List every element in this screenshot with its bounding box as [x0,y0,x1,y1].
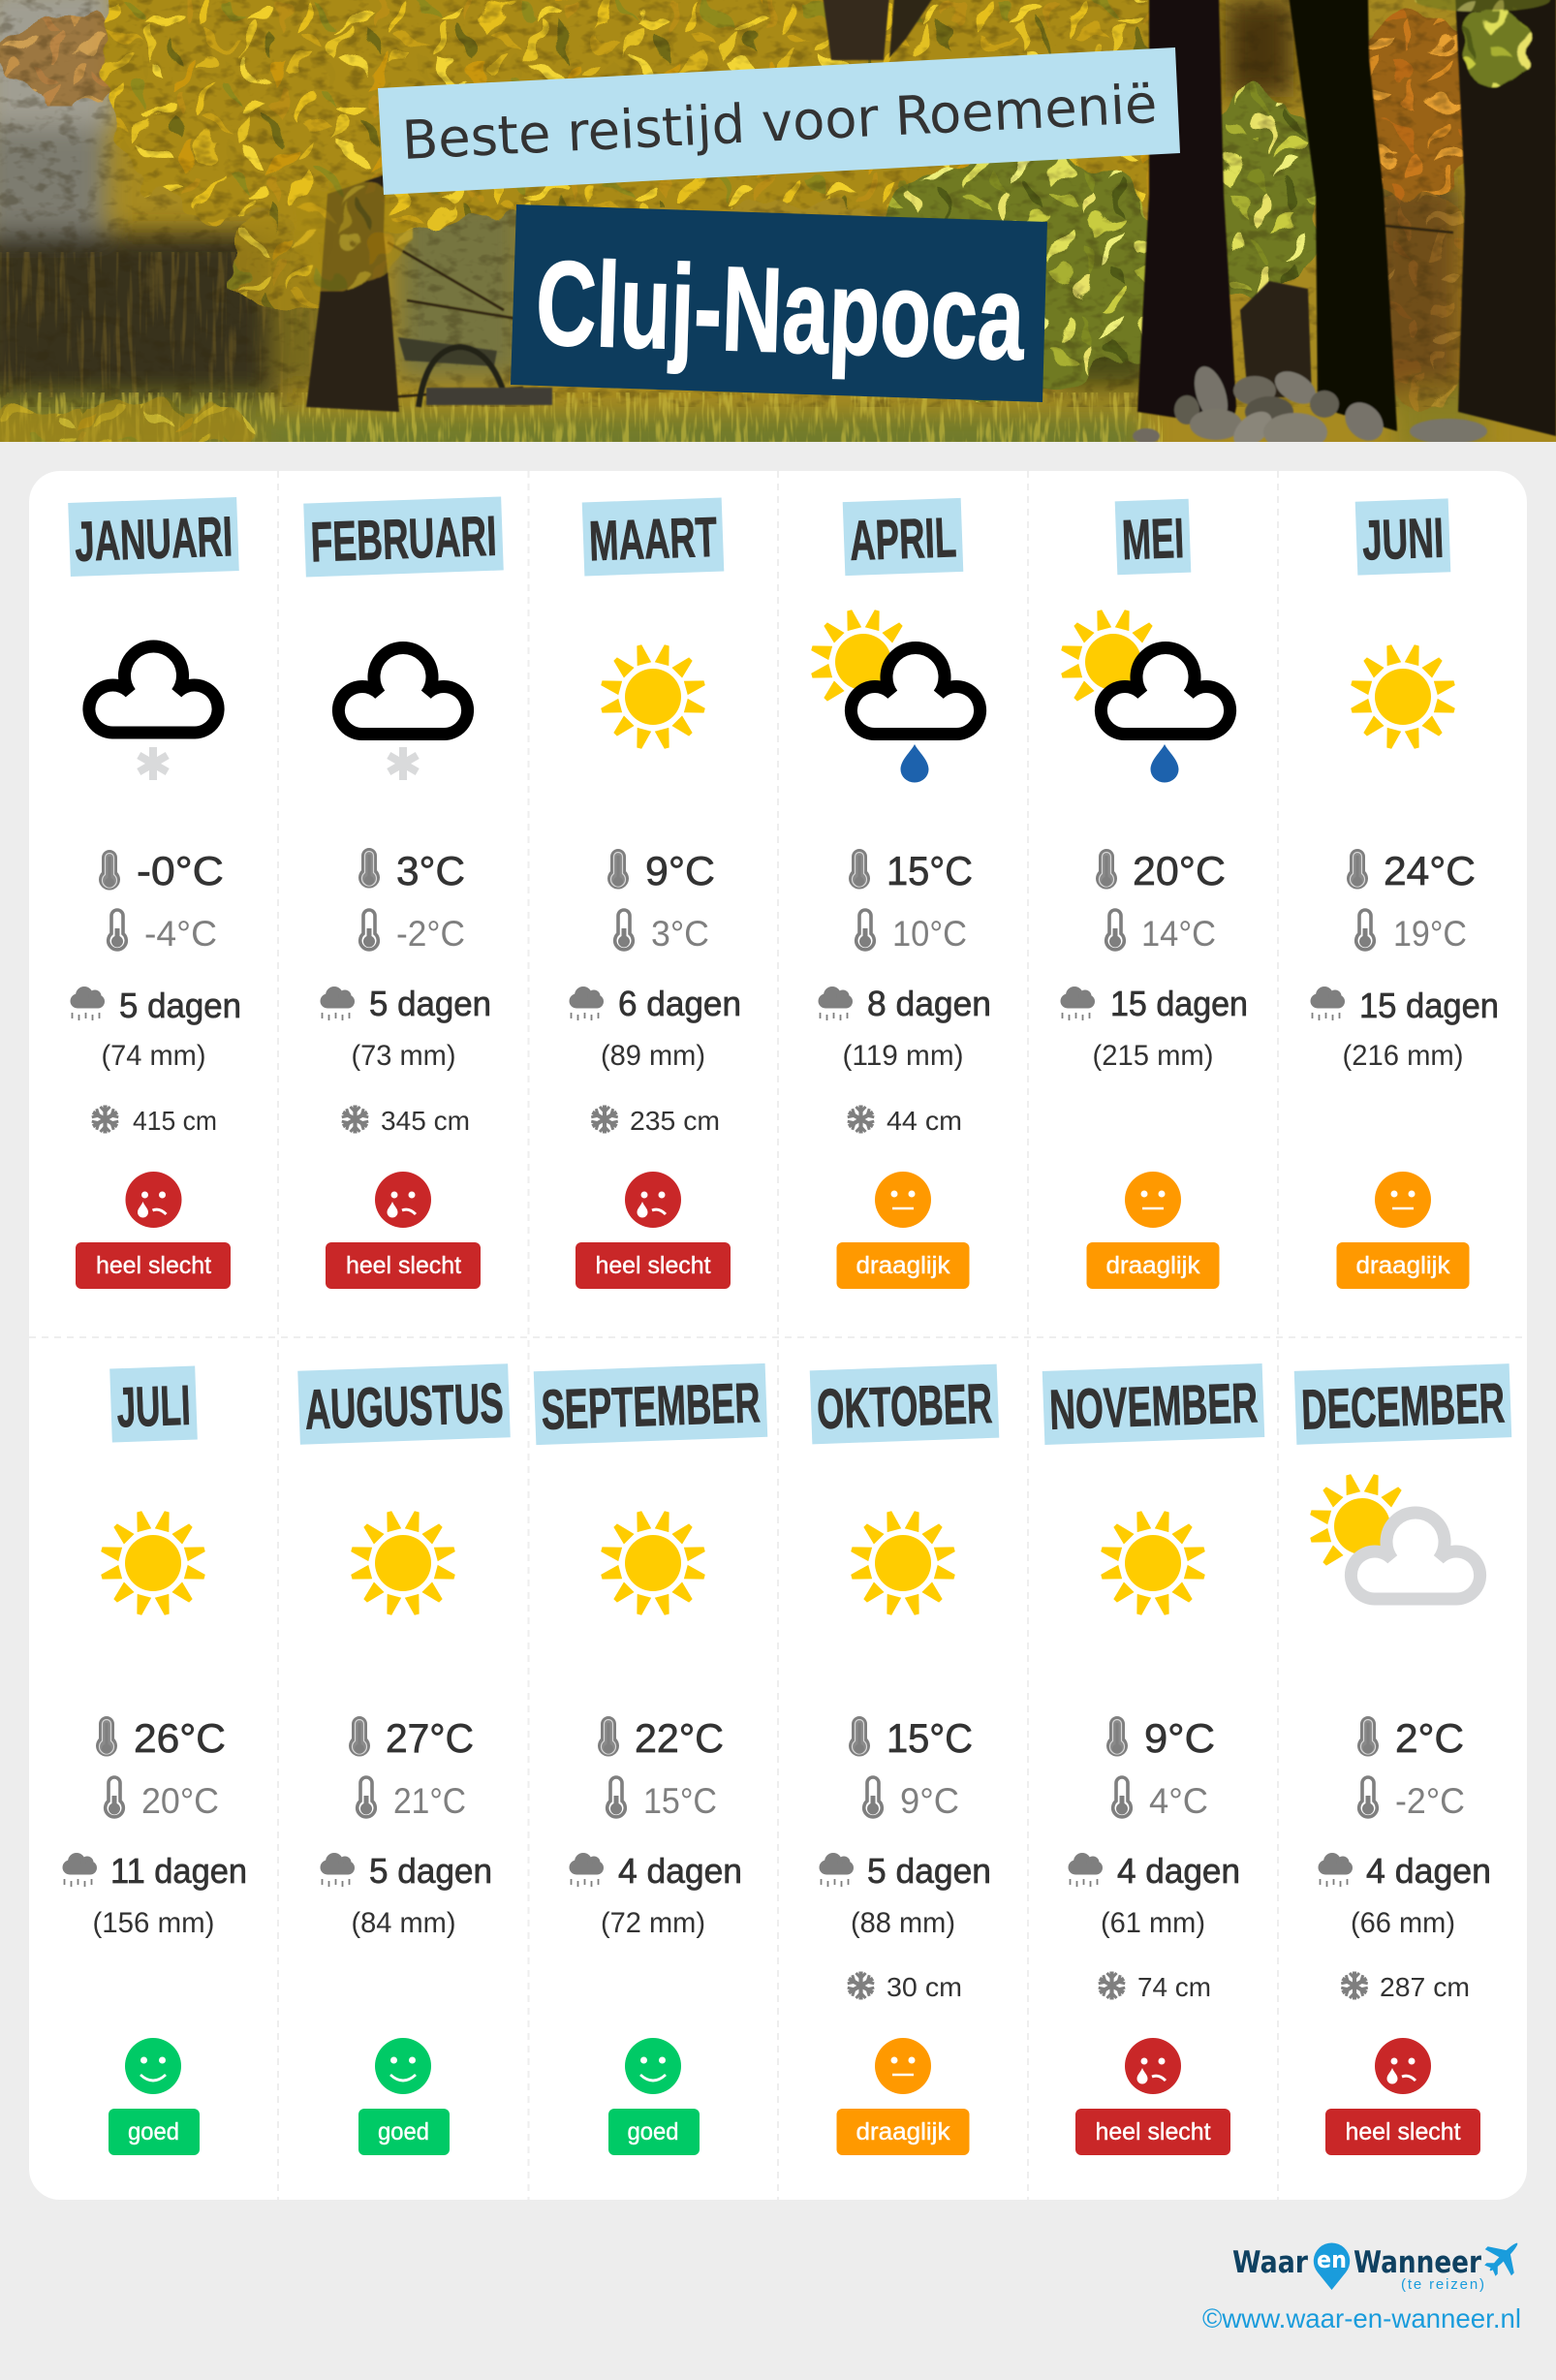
min temperature: 21°C [393,1781,466,1821]
max temperature [849,848,973,893]
rainfall: (61 mm) [1101,1907,1205,1939]
month heading [1043,1363,1264,1445]
snow [846,1105,962,1136]
icon: sun, cloud and rain drop [1060,609,1230,783]
month heading [297,1363,511,1445]
rain days: 4 dagen [618,1851,742,1891]
max temperature [349,1715,474,1761]
panel: oktober [810,1364,999,2155]
month heading: SEPTEMBER [541,1371,762,1442]
rainfall: (73 mm) [351,1040,455,1072]
max temperature: 20°C [1133,848,1226,893]
panel: februari [303,496,504,1289]
min temperature: 10°C [892,914,967,954]
rating face [625,1172,681,1228]
month heading: APRIL [849,506,957,573]
max temperature [1106,1715,1215,1761]
month heading [1355,498,1450,576]
min temperature: 15°C [643,1781,717,1821]
max temperature: -0°C [137,848,224,893]
rating face [1125,1172,1181,1228]
month heading [109,1365,198,1443]
rating badge [837,2109,969,2155]
snow: 74 cm [1137,1972,1211,2002]
min temperature [856,910,967,954]
min temperature: -2°C [396,914,465,954]
rating face [125,2038,181,2094]
snow [1097,1971,1211,2002]
rating badge [1075,2109,1230,2155]
rainfall: (66 mm) [1351,1907,1455,1939]
month heading: JULI [115,1374,192,1439]
rating badge: draaglijk [1106,1252,1200,1279]
snow: 415 cm [133,1106,217,1136]
rating face [375,2038,431,2094]
rating badge: heel slecht [1345,2118,1461,2145]
panel: november [1043,1363,1264,2155]
icon: sun and grey cloud [1309,1473,1480,1599]
rating badge [76,1242,231,1289]
logo: Waar en Wanneer: (te reizen) [1401,2276,1484,2293]
icon: sun [1350,643,1456,750]
month heading: JANUARI [74,505,233,574]
max temperature: 15°C [887,1715,973,1761]
min temperature [1106,910,1216,954]
rating badge [837,1242,969,1289]
rating badge: draaglijk [856,1252,950,1279]
icon: sun [100,1510,206,1616]
icon: airplane [1477,2230,1531,2284]
website url: ©www.waar-en-wanneer.nl [1202,2303,1521,2333]
rainfall: (88 mm) [851,1907,955,1939]
rain days: 6 dagen [618,984,741,1023]
min temperature: 20°C [141,1781,219,1821]
month heading [68,497,239,577]
rain days [320,984,491,1023]
logo: Waar en Wanneer: Wanneer [1354,2245,1482,2280]
panel: december [1294,1363,1511,2155]
rating badge: draaglijk [856,2118,950,2145]
icon: map pin: en [1317,2246,1347,2273]
min temperature: 3°C [651,914,709,954]
max temperature: 3°C [396,848,465,893]
rating badge: goed [128,2118,179,2145]
rating badge: heel slecht [96,1252,211,1279]
rating badge [109,2109,200,2155]
snow [846,1971,962,2002]
rainfall: (74 mm) [101,1040,205,1072]
snow: 235 cm [630,1106,720,1136]
month heading: OKTOBER [816,1372,993,1441]
rating badge: draaglijk [1356,1252,1450,1279]
max temperature: 2°C [1395,1715,1464,1761]
rainfall: (89 mm) [601,1040,705,1072]
min temperature [1359,1777,1465,1821]
rainfall: (216 mm) [1343,1040,1463,1072]
title banner: Beste reistijd voor Roemenië: Beste reistijd voor Roemenië [401,73,1159,172]
min temperature: -4°C [144,914,217,954]
icon: cloud with snow [338,647,468,780]
max temperature [99,848,224,893]
max temperature [607,848,715,893]
rainfall: (84 mm) [351,1907,455,1939]
rainfall: (215 mm) [1093,1040,1213,1072]
max temperature: 9°C [645,848,715,893]
logo: Waar en Wanneer: Waar [1232,2245,1309,2280]
snow: 345 cm [381,1106,470,1136]
month heading: MAART [588,506,718,573]
rating badge [358,2109,450,2155]
rain days: 5 dagen [369,1851,492,1891]
rain days: 4 dagen [1117,1851,1240,1891]
rating face [875,1172,931,1228]
rainfall: (119 mm) [843,1040,963,1072]
rain days: 5 dagen [119,986,241,1025]
rating badge [1337,1242,1469,1289]
month heading [843,498,963,576]
month heading: JUNI [1361,507,1445,572]
rain days: 5 dagen [369,984,491,1023]
min temperature [615,910,709,954]
rating badge: heel slecht [346,1252,461,1279]
max temperature [598,1715,724,1761]
max temperature [358,848,465,893]
rating face [1125,2038,1181,2094]
snow: 30 cm [887,1972,962,2002]
rating badge: heel slecht [595,1252,711,1279]
panel: augustus [297,1363,511,2155]
max temperature: 9°C [1144,1715,1215,1761]
rating face [1375,1172,1431,1228]
icon: sun, cloud and rain drop [810,609,980,783]
logo: Waar en Wanneer [1232,2230,1531,2293]
snow: 44 cm [887,1106,962,1136]
rating badge [1087,1242,1219,1289]
min temperature [360,910,465,954]
panel: april [810,498,991,1289]
rating badge: heel slecht [1095,2118,1211,2145]
rating face [625,2038,681,2094]
max temperature: 22°C [635,1715,724,1761]
min temperature: 19°C [1393,914,1467,954]
min temperature [358,1777,466,1821]
max temperature: 24°C [1384,848,1476,893]
rain days: 4 dagen [1366,1851,1491,1891]
panel: juli [62,1365,247,2155]
month heading [582,498,724,576]
snow [590,1105,720,1136]
min temperature [607,1777,717,1821]
rain days: 8 dagen [867,984,991,1023]
min temperature: 4°C [1149,1781,1208,1821]
snow [340,1105,470,1136]
max temperature [849,1715,973,1761]
panel: september [534,1363,767,2155]
month heading: AUGUSTUS [304,1371,505,1442]
rating badge [1325,2109,1480,2155]
snow [1340,1971,1470,2002]
rating face [875,2038,931,2094]
title banner: Cluj-Napoca [511,204,1047,402]
month heading [534,1363,767,1445]
panel: januari [68,497,241,1289]
snow: 287 cm [1380,1972,1470,2002]
rating badge: goed [378,2118,429,2145]
icon: sun [600,1510,706,1616]
min temperature: -2°C [1395,1781,1465,1821]
rain days: 11 dagen [110,1851,247,1891]
rainfall: (72 mm) [601,1907,705,1939]
rain days: 5 dagen [867,1851,991,1891]
min temperature [1113,1777,1208,1821]
min temperature: 14°C [1141,914,1216,954]
month heading [303,496,504,578]
rainfall: (156 mm) [93,1907,215,1939]
max temperature [1357,1715,1464,1761]
rating badge [326,1242,481,1289]
rating face [126,1172,182,1228]
rating badge: goed [628,2118,678,2145]
title banner: Beste reistijd voor Roemenië [378,47,1180,195]
max temperature: 26°C [134,1715,226,1761]
snow [90,1105,217,1136]
rating face [1375,2038,1431,2094]
min temperature: 9°C [900,1781,959,1821]
rating badge [576,1242,731,1289]
rain days: 15 dagen [1359,986,1499,1025]
month heading [1115,499,1191,575]
month heading: NOVEMBER [1048,1371,1259,1442]
month heading: FEBRUARI [310,505,498,574]
min temperature [109,910,217,954]
min temperature [864,1777,959,1821]
header photo: autumn forest [0,0,1556,465]
max temperature: 15°C [887,848,973,893]
min temperature [106,1777,219,1821]
month heading [810,1364,999,1444]
rating face [375,1172,431,1228]
panel: maart [570,498,741,1289]
rain days: 15 dagen [1110,984,1248,1023]
panel: mei [1060,499,1248,1289]
icon: sun [1100,1510,1206,1616]
panel: juni [1310,498,1499,1289]
title banner: Cluj-Napoca: Cluj-Napoca [534,236,1027,386]
icon: sun [850,1510,956,1616]
min temperature [1356,910,1467,954]
icon: map pin [1314,2242,1350,2290]
icon: sun [600,643,706,750]
icon: cloud with snow [89,646,218,780]
white card panel [29,471,1527,2200]
rain days [70,986,241,1025]
max temperature: 27°C [386,1715,474,1761]
month heading: MEI [1121,507,1185,572]
rating badge [608,2109,700,2155]
icon: sun [350,1510,456,1616]
